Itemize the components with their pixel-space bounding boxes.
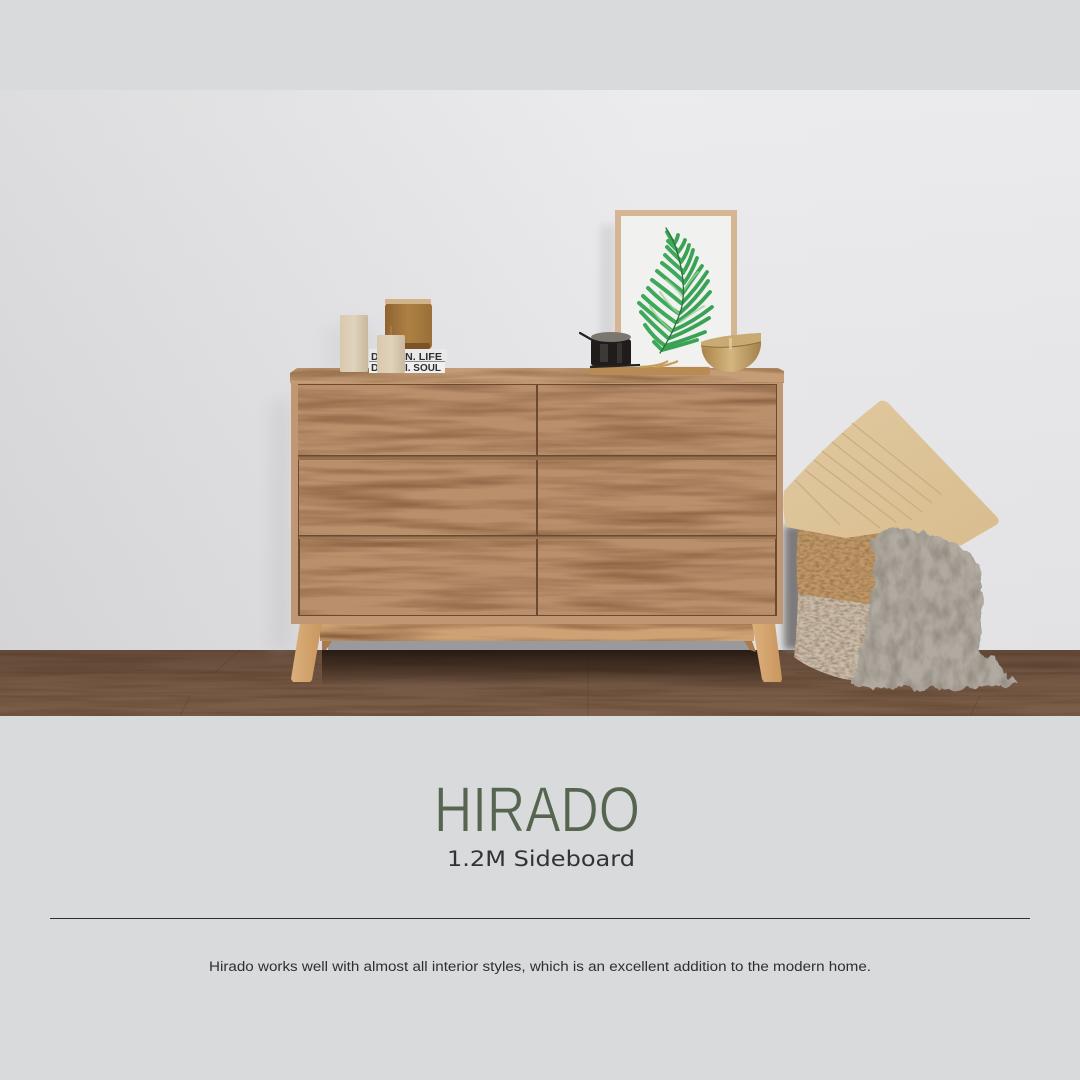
wall (0, 90, 1080, 650)
picture frame (615, 210, 737, 366)
beige lower band (794, 593, 882, 684)
top board (290, 368, 784, 383)
jute upper band (796, 528, 882, 606)
woven basket (794, 528, 882, 684)
wood floor (0, 650, 1080, 716)
drawer: top right (538, 385, 776, 455)
cushion quilting lines (795, 423, 942, 528)
back legs (322, 641, 756, 652)
drawer: middle right (538, 460, 776, 535)
drawer gap bands (298, 455, 776, 539)
title: HIRADO (434, 774, 640, 846)
front right leg (752, 623, 782, 682)
cabinet body (291, 380, 783, 624)
product photo scene (0, 90, 1080, 716)
black pot (580, 332, 640, 367)
drawer: bottom left (300, 539, 536, 615)
stacked books: I. SOUL (405, 362, 442, 374)
framed leaf print (615, 210, 737, 366)
cushion (783, 401, 999, 546)
subtitle: 1.2M Sideboard (447, 847, 635, 872)
stacked books: D (371, 362, 379, 374)
front left leg (291, 623, 322, 682)
stacked books: D (371, 351, 379, 363)
drawer: bottom right (538, 539, 775, 615)
wooden tray with utensils (590, 361, 710, 375)
short candle (377, 326, 405, 373)
sideboard (290, 368, 784, 682)
drawers (298, 385, 776, 615)
jar with lid (385, 299, 432, 349)
gutter below photo (0, 716, 1080, 1080)
icon: palm leaf (639, 228, 712, 353)
apron rail (320, 623, 754, 641)
description text: Hirado works well with almost all interior styles, which is an excellent addition to the modern home. (209, 959, 871, 974)
furniture shadows (272, 225, 804, 686)
stacked books (369, 349, 447, 374)
brass bowl (701, 333, 761, 372)
sheepskin throw (852, 530, 1018, 689)
divider line (50, 918, 1030, 919)
drawer: middle left (299, 460, 536, 535)
tall candle (340, 315, 368, 372)
stacked books: N. LIFE (405, 351, 442, 363)
drawer: top left (298, 385, 536, 455)
